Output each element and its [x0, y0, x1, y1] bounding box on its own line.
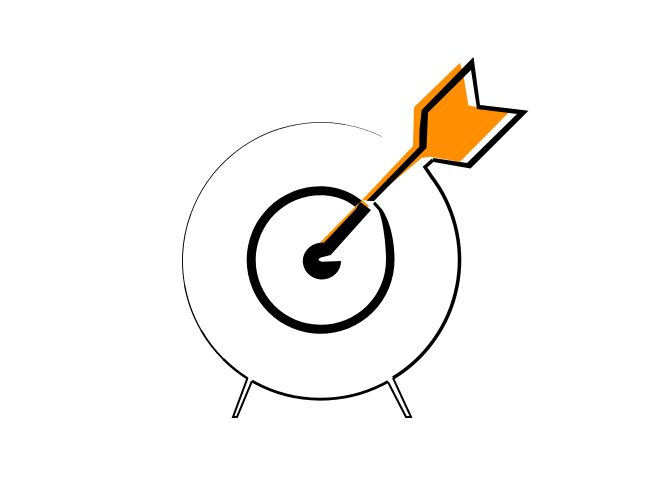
- lower shaft orange edge: [320, 200, 369, 250]
- inner target ring: [247, 186, 394, 334]
- outer target ring, tapered left side: [183, 122, 382, 379]
- bullseye disc with lower shaft: [303, 202, 371, 279]
- arrow shaft and fletching outline: [367, 57, 528, 201]
- arrow fletching and upper shaft orange fill: [362, 63, 508, 201]
- right leg: [388, 378, 411, 417]
- outer target ring, bottom arc: [252, 381, 388, 399]
- outer target ring, right arc: [393, 160, 459, 378]
- left leg: [233, 378, 252, 417]
